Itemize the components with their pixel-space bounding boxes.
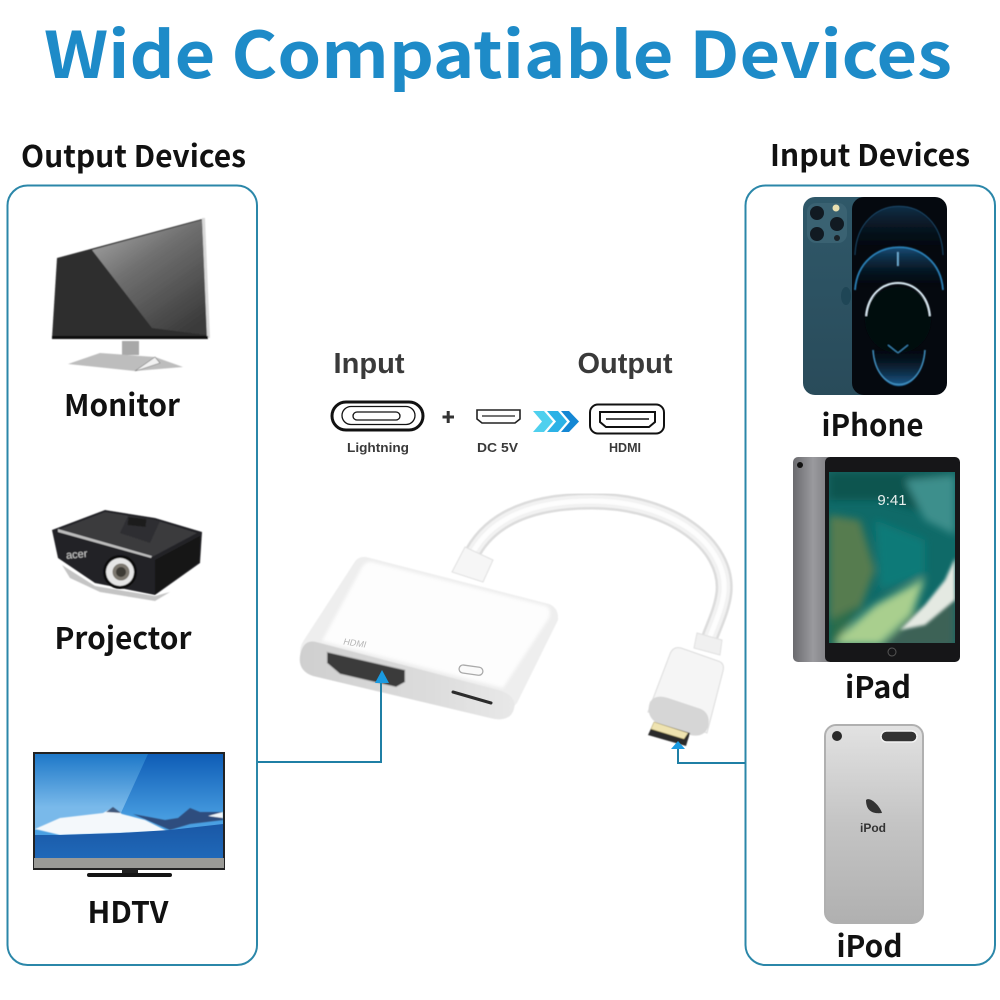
icon: iPod: iPod	[860, 821, 886, 835]
lightning connector	[648, 633, 723, 746]
icon: HDTV	[33, 752, 225, 877]
label: HDTV: HDTV	[88, 888, 169, 932]
HDMI marking: HDMI	[342, 637, 368, 650]
icon: projector: acer	[66, 548, 88, 562]
label: lightning: Lightning	[347, 441, 409, 455]
charging symbol	[459, 665, 483, 676]
title: Wide Compatiable Devices	[44, 5, 952, 97]
label: iPad: iPad	[845, 663, 911, 707]
icon: lightning port	[332, 402, 423, 430]
charging socket	[453, 692, 491, 703]
icon: iPod	[825, 725, 923, 923]
port diagram	[332, 402, 664, 455]
adapter body	[300, 557, 558, 716]
icon: iPad: 9:41	[877, 492, 907, 509]
icon: HDMI port	[590, 404, 664, 434]
heading: input devices: Input Devices	[770, 131, 970, 175]
label: iPod: iPod	[836, 922, 902, 966]
icon: iPad	[793, 457, 960, 662]
heading: output: Output	[578, 348, 673, 380]
icon: iPhone	[803, 197, 947, 395]
label: projector: Projector	[54, 614, 192, 658]
heading: output devices: Output Devices	[21, 132, 246, 176]
icon: DC port	[477, 410, 520, 423]
adapter product photo	[300, 501, 724, 746]
label: monitor: Monitor	[64, 381, 181, 425]
label: iPhone: iPhone	[822, 401, 924, 445]
icon: monitor	[52, 218, 210, 371]
icon: chevron arrows	[533, 411, 579, 432]
panel: output devices	[8, 132, 257, 965]
HDMI socket	[327, 652, 405, 687]
icon: plus	[442, 411, 454, 423]
icon: projector	[52, 510, 202, 601]
cable	[473, 501, 724, 642]
panel: input devices	[746, 131, 995, 966]
adapter front face	[300, 642, 514, 719]
panel frame: input devices	[746, 186, 995, 965]
label: DC 5V: DC 5V	[477, 441, 519, 455]
connector: HDMI to output panel	[258, 670, 389, 762]
cable strain relief	[452, 547, 493, 582]
panel frame: output devices	[8, 186, 257, 965]
label: HDMI: HDMI	[609, 441, 641, 455]
heading: input: Input	[334, 348, 405, 380]
connector: lightning to input panel	[671, 741, 745, 763]
